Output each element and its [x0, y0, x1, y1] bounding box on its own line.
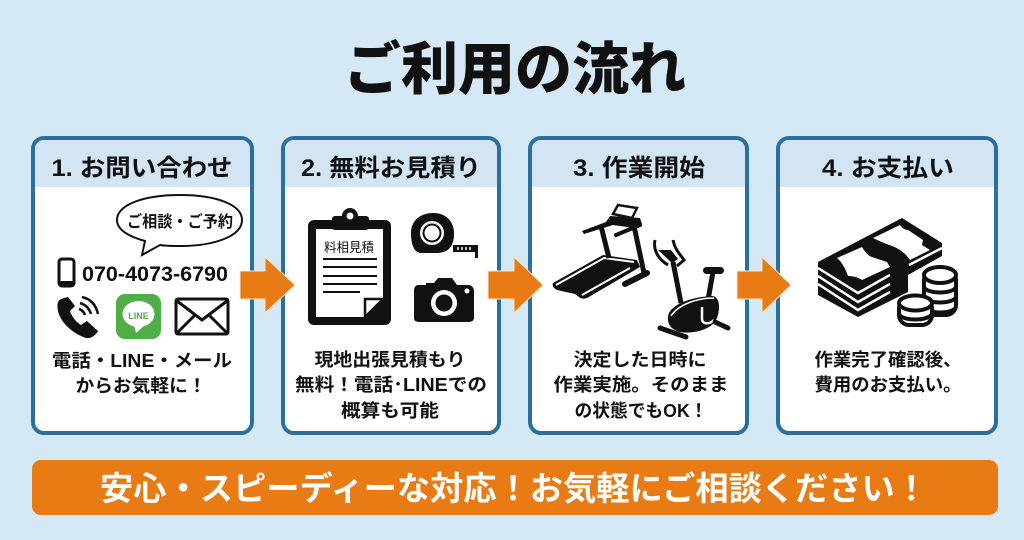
callout: consultation and booking — [117, 195, 242, 255]
description: step 2: 現地出張見積もり — [314, 350, 466, 370]
heading: step 4: 4. お支払い — [822, 155, 954, 182]
heading: step 2: 2. 無料お見積り — [301, 155, 481, 182]
icon: LINE app — [116, 294, 161, 339]
heading: step 1: 1. お問い合わせ — [52, 155, 232, 182]
icon: treadmill — [553, 205, 647, 299]
coins: small stack — [899, 296, 932, 325]
icon: telephone with signal — [57, 297, 98, 338]
arrow: step 1 to 2 — [240, 257, 295, 313]
description: step 1: からお気軽に！ — [76, 375, 206, 396]
phone number: 070-4073-6790 — [82, 263, 228, 286]
icon: money and coins — [818, 218, 956, 325]
banner: 安心・スピーディーな対応！お気軽にご相談ください！ — [100, 470, 928, 507]
description: step 3 — [554, 350, 728, 421]
description: step 2: 概算も可能 — [341, 400, 439, 421]
description: step 2 — [295, 350, 487, 421]
icon: clipboard estimate — [308, 208, 391, 325]
panel: step 3 work — [530, 138, 747, 433]
description: step 1: 電話・LINE・メール — [52, 351, 232, 371]
description: step 4: 費用のお支払い。 — [814, 375, 962, 395]
icon: tape measure — [411, 213, 478, 258]
description: step 4: 作業完了確認後、 — [814, 350, 962, 370]
arrow: step 2 to 3 — [488, 257, 543, 313]
arrow: step 3 to 4 — [737, 257, 791, 313]
icon: camera — [414, 278, 474, 322]
description: step 2: 無料！電話･LINEでの — [295, 375, 487, 395]
description: step 3: の状態でもOK！ — [574, 400, 708, 421]
heading: step 3: 3. 作業開始 — [573, 155, 705, 182]
description: step 4 — [814, 350, 962, 395]
icon: clipboard estimate: 料相見積 — [324, 240, 374, 255]
panel: step 1 inquiry — [33, 138, 252, 433]
icon: exercise bike — [655, 240, 728, 337]
title: ご利用の流れ — [344, 38, 686, 102]
callout: consultation and booking: ご相談・ご予約 — [127, 212, 233, 231]
banner — [32, 460, 998, 515]
description: step 3: 作業実施。そのまま — [554, 375, 728, 395]
description: step 3: 決定した日時に — [574, 350, 706, 370]
icon: LINE app: LINE — [128, 311, 149, 321]
panel: step 4 payment — [778, 138, 996, 433]
panel: step 2 estimate — [283, 138, 499, 433]
description: step 1 — [52, 351, 232, 396]
icon: envelope — [176, 299, 228, 334]
coins: large stack — [924, 267, 956, 315]
icon: smartphone — [59, 259, 74, 286]
